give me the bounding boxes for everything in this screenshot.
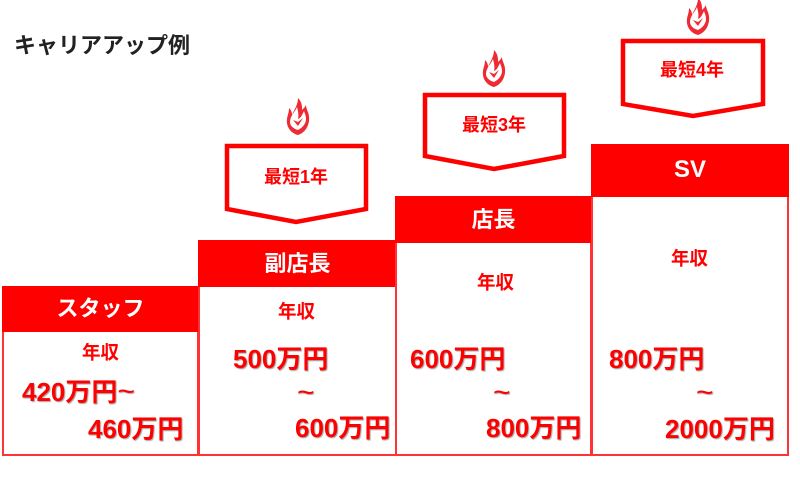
deputy heading (198, 240, 397, 287)
callout text: 最短1年 (264, 167, 328, 187)
staff salary from: 420万円~ (22, 375, 135, 408)
manager salary to: 800万円 (486, 413, 581, 443)
manager salary from: 600万円 (410, 344, 505, 374)
supervisor heading: SV (674, 156, 706, 183)
staff salary to: 460万円 (88, 414, 183, 444)
panel: store manager (395, 196, 591, 456)
title: キャリアアップ例 (14, 33, 190, 58)
icon: flame 1 (286, 98, 310, 135)
supervisor salary label: 年収 (671, 248, 708, 269)
panel: supervisor (591, 144, 789, 456)
pentagon outline (620, 38, 766, 118)
supervisor body (591, 144, 789, 456)
callout: 1 year (224, 144, 368, 224)
staff heading: スタッフ (56, 296, 144, 321)
manager salary label: 年収 (477, 272, 514, 293)
staff body (2, 286, 199, 456)
deputy heading: 副店長 (264, 251, 330, 276)
deputy tilde: ~ (297, 376, 315, 409)
callout: 3 years (422, 92, 566, 172)
supervisor salary from: 800万円 (609, 344, 704, 374)
manager heading (395, 196, 592, 243)
pentagon outline (224, 144, 368, 224)
icon: flame 3 (686, 0, 710, 35)
callout text: 最短3年 (462, 115, 526, 135)
supervisor heading (591, 144, 789, 197)
callout: 4 years (620, 38, 766, 118)
staff heading (2, 286, 199, 332)
supervisor tilde: ~ (696, 376, 714, 409)
deputy body (198, 240, 397, 456)
callout text: 最短4年 (660, 60, 724, 80)
deputy salary from: 500万円 (233, 344, 328, 374)
pentagon outline (422, 92, 566, 172)
deputy salary to: 600万円 (295, 413, 390, 443)
manager body (395, 196, 592, 456)
panel: staff (2, 286, 198, 456)
icon: flame 2 (482, 50, 506, 87)
manager heading: 店長 (471, 207, 516, 232)
staff salary label: 年収 (82, 342, 119, 363)
supervisor salary to: 2000万円 (665, 414, 775, 444)
manager tilde: ~ (493, 376, 511, 409)
deputy salary label: 年収 (278, 301, 315, 322)
panel: deputy manager (198, 240, 395, 456)
